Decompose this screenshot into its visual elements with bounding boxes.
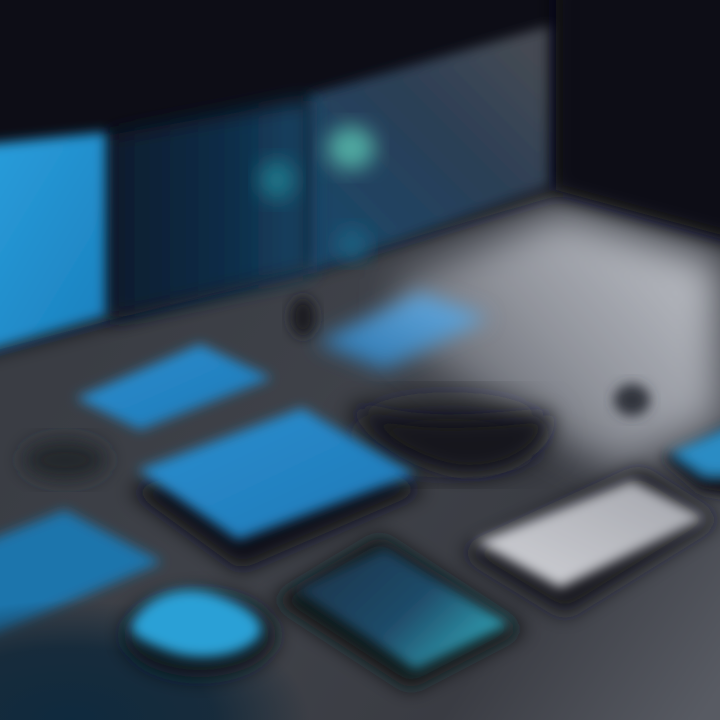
shadow: main tablet [130, 430, 425, 570]
highlight: dark right top corner [556, 0, 720, 240]
panel: bright blue left screen [0, 132, 106, 356]
icon: small dark knob near card [290, 297, 316, 337]
icon: dark round button [614, 384, 650, 416]
device: blue device at right edge [662, 422, 720, 498]
device: lower left tablet [0, 510, 162, 645]
icon: teal dot [259, 160, 295, 200]
device: small rounded cyan tablet [124, 590, 276, 677]
panel: gray-blue back screen [308, 25, 552, 272]
shadow: under central devices [355, 405, 545, 465]
device: top light-blue card [316, 292, 488, 370]
device: white tablet [462, 470, 718, 615]
panel: dark blue middle screen [110, 100, 310, 320]
device: dark phone with teal glow [272, 535, 525, 690]
panel: light slab [400, 212, 720, 470]
background: dark wall [0, 0, 720, 365]
device: main blue tablet [138, 408, 416, 540]
icon: lower teal dot [336, 228, 368, 260]
icon: glowing green dot [327, 126, 375, 170]
device: dark curved object [350, 405, 550, 472]
device: tablet upper left [76, 344, 272, 430]
shadow: left dark smudge [23, 440, 107, 480]
floor: dark blue bottom left [0, 590, 320, 720]
